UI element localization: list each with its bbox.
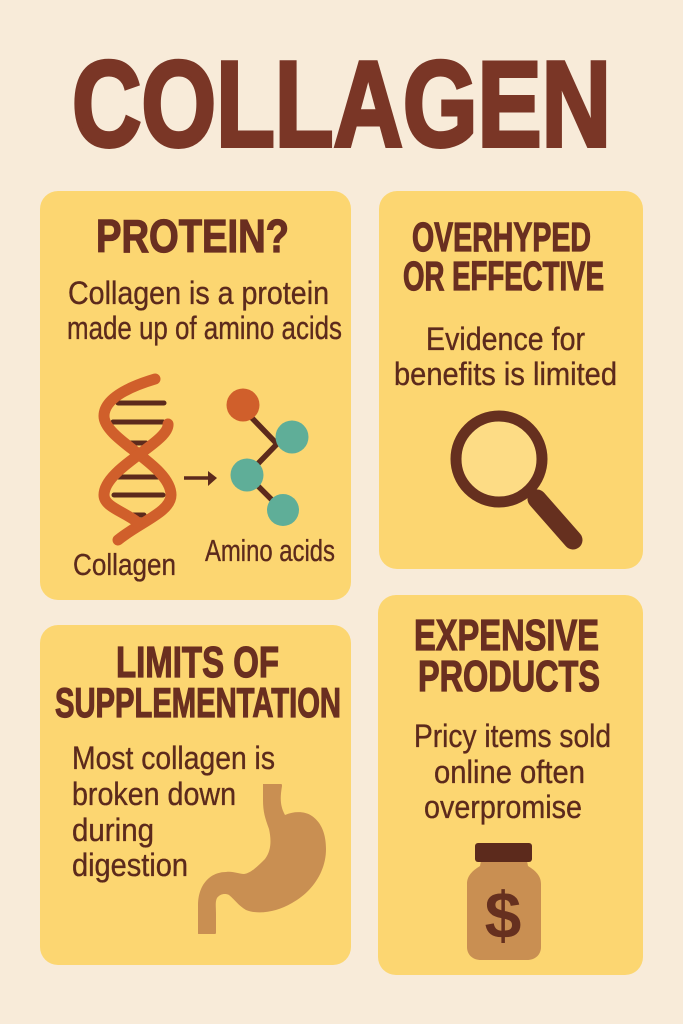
heading: limits of supplementation: SUPPLEMENTATION [55,679,341,726]
text: pricey items: Pricy items sold [414,718,611,754]
icon: supplement bottle [467,843,541,960]
label: amino acids: Amino acids [205,533,335,568]
icon: arrow [184,471,217,486]
heading: protein: PROTEIN? [96,210,289,262]
icon: magnifying glass [456,416,573,540]
text: evidence: Evidence for [426,321,585,357]
text: digestion: Most collagen is [72,740,275,776]
panel: limits of supplementation [40,625,351,965]
heading: expensive products: PRODUCTS [418,652,600,701]
text: pricey items: overpromise [424,789,582,825]
panel: expensive products [378,595,643,975]
text: evidence [394,321,617,392]
text: protein description: made up of amino acids [67,310,342,346]
panel: overhyped or effective [379,191,643,569]
text: protein description [67,275,342,346]
text: digestion: during [72,812,154,848]
heading: expensive products [414,611,600,701]
text: protein description: Collagen is a protein [68,275,329,311]
text: digestion: digestion [72,847,188,883]
text: pricey items: online often [434,754,585,790]
text: digestion: broken down [72,776,236,812]
icon: amino acid chain [226,388,308,526]
heading: overhyped or effective: OVERHYPED [412,214,591,260]
heading: overhyped or effective [403,214,604,299]
heading: limits of supplementation: LIMITS OF [116,638,279,687]
icon: collagen helix [104,379,171,540]
text: evidence: benefits is limited [394,356,617,392]
label: collagen: Collagen [73,547,176,582]
icon: stomach [198,784,326,934]
icon: dollar sign: $ [485,878,521,952]
text: digestion [72,740,275,883]
heading: expensive products: EXPENSIVE [414,611,599,660]
heading: limits of supplementation [55,638,341,726]
panel: protein [40,191,351,600]
text: pricey items [414,718,611,825]
